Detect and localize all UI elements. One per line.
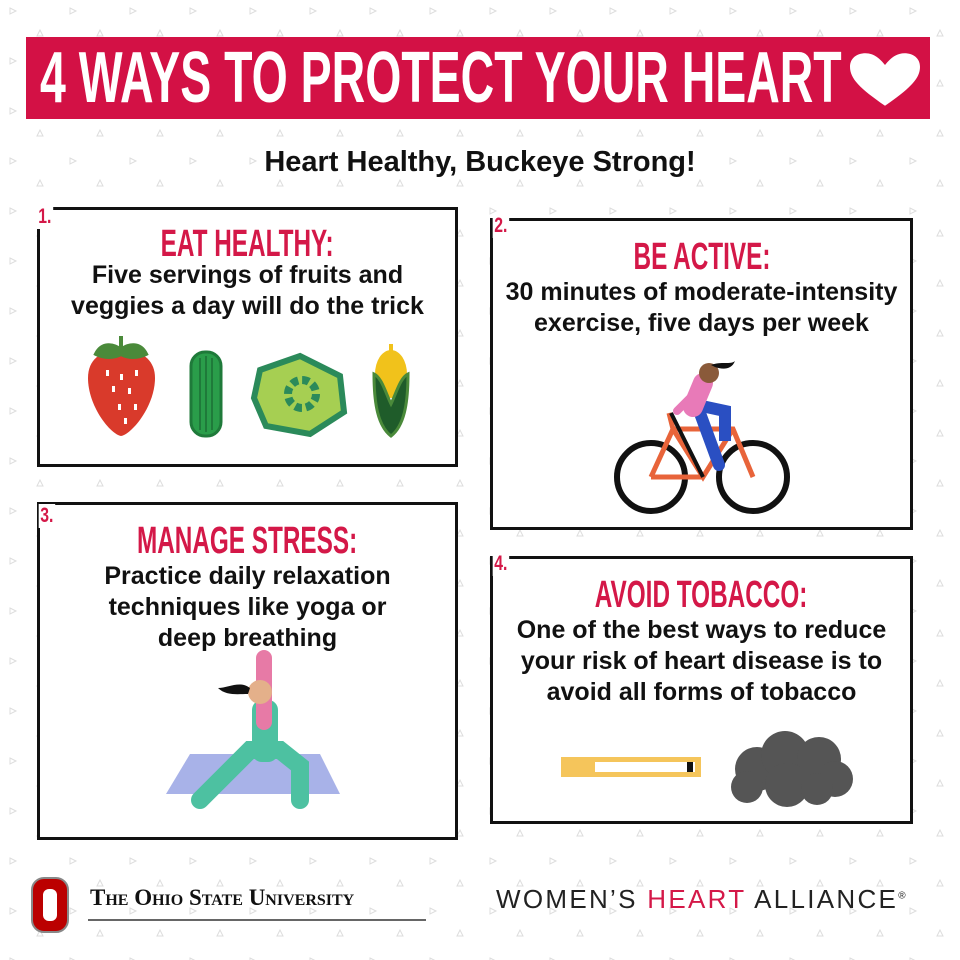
subtitle: Heart Healthy, Buckeye Strong! bbox=[264, 146, 696, 178]
logo: Ohio State bbox=[31, 877, 426, 933]
logo: Women's Heart Alliance: WOMEN’S HEART ALLIANCE® bbox=[496, 884, 908, 914]
panel: be active: 2. bbox=[494, 214, 507, 237]
panel: manage stress: MANAGE STRESS: bbox=[137, 520, 358, 562]
icons: fruits and veggies bbox=[88, 336, 410, 438]
panel: eat healthy: 1. bbox=[38, 205, 51, 228]
title banner: 4 WAYS TO PROTECT YOUR HEART bbox=[40, 38, 842, 118]
panel: avoid tobacco bbox=[490, 552, 913, 824]
panel: eat healthy: veggies a day will do the trick bbox=[71, 292, 424, 320]
panel: avoid tobacco: avoid all forms of tobacco bbox=[547, 678, 856, 706]
panel: manage stress bbox=[37, 502, 458, 840]
icon: cigarette bbox=[561, 757, 701, 777]
logo: Ohio State: The Ohio State University bbox=[90, 885, 354, 910]
panel: eat healthy bbox=[37, 205, 458, 467]
panel: be active bbox=[490, 214, 913, 530]
panel: manage stress: techniques like yoga or bbox=[109, 593, 386, 621]
panel: eat healthy: EAT HEALTHY: bbox=[161, 223, 334, 265]
icon: yoga bbox=[166, 650, 340, 809]
panel: manage stress: 3. bbox=[40, 504, 53, 527]
icon: cyclist bbox=[614, 361, 790, 514]
panel: be active: exercise, five days per week bbox=[534, 309, 869, 337]
panel: manage stress: Practice daily relaxation bbox=[104, 562, 391, 590]
icon: smoke cloud bbox=[731, 731, 853, 807]
panel: avoid tobacco: AVOID TOBACCO: bbox=[595, 574, 808, 616]
panel: avoid tobacco: 4. bbox=[494, 552, 507, 575]
panel: be active: BE ACTIVE: bbox=[633, 236, 770, 278]
panel: manage stress: deep breathing bbox=[158, 624, 337, 652]
icon: heart bbox=[850, 53, 920, 106]
panel: be active: 30 minutes of moderate-intensity bbox=[506, 278, 897, 306]
panel: avoid tobacco: your risk of heart disease is to bbox=[521, 647, 882, 675]
panel: eat healthy: Five servings of fruits and bbox=[92, 261, 403, 289]
panel: avoid tobacco: One of the best ways to reduce bbox=[517, 616, 886, 644]
